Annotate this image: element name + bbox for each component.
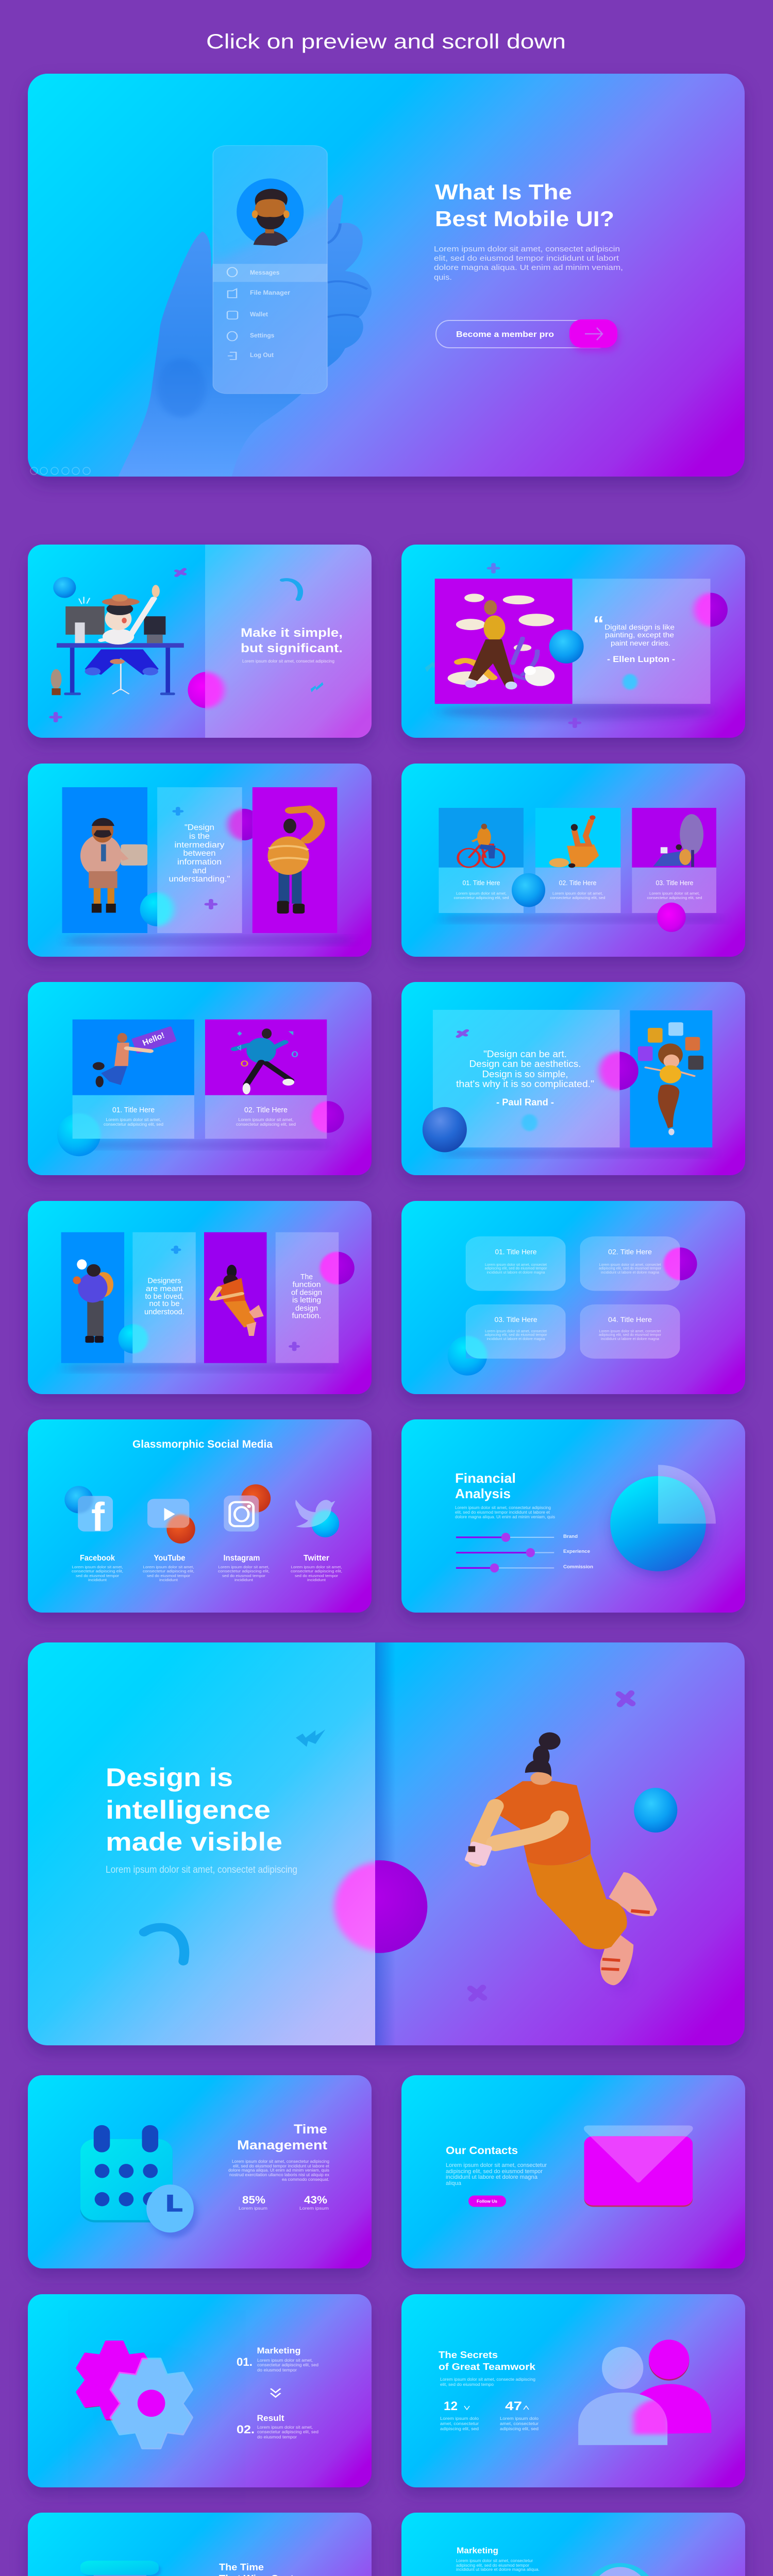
slide controls — [30, 467, 90, 474]
heading: Best Mobile UI? — [435, 207, 614, 231]
heading — [106, 1763, 282, 1856]
step 01: Marketing — [257, 2346, 301, 2355]
card text: consectetur adipiscing elit, sed — [647, 895, 702, 900]
quote text: Design can be aesthetics. — [469, 1059, 581, 1069]
stat: 85% — [239, 2194, 267, 2211]
body text — [434, 245, 623, 282]
card text: adipiscing elit, sed do eiusmod tempor — [599, 1267, 662, 1270]
card text — [484, 1263, 662, 1341]
card text: adipiscing elit, sed do eiusmod tempor — [599, 1333, 662, 1337]
heading: Glassmorphic Social Media — [132, 1438, 273, 1450]
network text — [72, 1565, 342, 1582]
card text: Lorem ipsum dolor sit amet, — [106, 1117, 161, 1122]
stat: 12 down: 12 — [444, 2399, 458, 2413]
ball behind glass — [332, 1860, 427, 1953]
panel: four columns — [28, 1201, 372, 1401]
network text: Lorem ipsum dolor sit amet, — [72, 1565, 123, 1569]
menu labels: Wallet — [250, 311, 268, 318]
network text: consectetur adipiscing elit, — [218, 1569, 270, 1573]
decorative balls behind glass — [53, 577, 224, 708]
glass block, image block and figure — [423, 1010, 712, 1156]
stat: 47 up: adipiscing elit, sed — [500, 2426, 539, 2431]
column text: function: function — [293, 1281, 321, 1289]
card titles — [495, 1248, 652, 1324]
quote text: and — [193, 867, 206, 875]
quote text: intermediary — [174, 841, 225, 850]
body text: aliqua — [446, 2180, 462, 2187]
heading: of Great Teamwork — [439, 2362, 536, 2372]
stat: 43%: 43% — [304, 2194, 327, 2206]
network text: consectetur adipiscing elit, — [72, 1569, 123, 1573]
step 01: consectetur adipiscing elit, sed — [257, 2362, 318, 2367]
quote text: information — [177, 858, 222, 867]
step 01: Lorem ipsum dolor sit amet, — [257, 2358, 313, 2363]
panel: four glass cards — [401, 1201, 745, 1401]
button — [468, 2196, 506, 2207]
network text: Lorem ipsum dolor sit amet, — [143, 1565, 194, 1569]
stat: 85%: 85% — [242, 2194, 265, 2206]
heading — [435, 180, 614, 231]
heading — [219, 2562, 325, 2576]
column text: designers — [144, 1277, 184, 1316]
section: marketing: Marketing — [457, 2546, 498, 2555]
card text: Lorem ipsum dolor sit amet, consectet — [599, 1330, 661, 1333]
body text: nostrud exercitation ullamco laboris nisi ut aliquip ex — [229, 2172, 330, 2177]
card titles: 04. Title Here — [608, 1315, 652, 1324]
columns and figures — [62, 787, 350, 943]
section: marketing — [456, 2546, 540, 2572]
image block and glass quote block — [425, 564, 728, 727]
heading: The Time — [219, 2562, 264, 2572]
quote text: "Design — [184, 823, 214, 832]
body text — [440, 2377, 535, 2387]
network text: consectetur adipiscing elit, — [143, 1569, 194, 1573]
panel: marketing result — [28, 2294, 372, 2495]
heading: The Secrets — [439, 2350, 498, 2360]
heading — [237, 2122, 328, 2153]
quote text: - Paul Rand - — [496, 1097, 554, 1108]
card titles: 01. Title Here — [495, 1248, 537, 1256]
quote text: between — [183, 849, 215, 858]
balls and glass cards — [448, 1236, 697, 1376]
quote text: Design is so simple, — [482, 1069, 568, 1079]
panel: three titled cards — [401, 764, 745, 964]
network names: Instagram — [224, 1554, 260, 1563]
card titles: 03. Title Here — [495, 1315, 537, 1324]
network text: sed do eiusmod tempor — [222, 1573, 266, 1578]
body text: dolore magna aliqua. Ut enim ad minim veniam, quis — [228, 2167, 329, 2173]
body text: Lorem ipsum dolor sit amet, consectetur adipiscing — [232, 2159, 329, 2164]
icon: magnifying glass — [577, 2564, 683, 2576]
card text: Lorem ipsum dolor sit amet, consectet — [485, 1263, 547, 1267]
column text: function: is letting — [292, 1296, 321, 1304]
heading: Make it simple, — [241, 626, 343, 640]
card text: Lorem ipsum dolor sit amet, — [552, 891, 603, 895]
card text — [453, 891, 702, 900]
column text: designers: to be loved, — [145, 1293, 183, 1301]
card text: consectetur adipiscing elit, sed — [104, 1122, 163, 1127]
illustration: floating woman — [144, 1688, 677, 2004]
panel: design is intelligence made visible — [28, 1642, 745, 2054]
slider labels: Experience — [563, 1549, 590, 1554]
card text: incididunt ut labore et dolore magna — [486, 1337, 545, 1341]
body text: Lorem ipsum dolor sit amet, consectet adipiscin — [434, 245, 620, 253]
panel: marketing, SEO, entertainment — [401, 2513, 745, 2576]
column text: function — [291, 1273, 322, 1320]
slider labels: Brand — [563, 1534, 578, 1539]
card text: Lorem ipsum dolor sit amet, consectet — [599, 1263, 661, 1267]
caption: Lorem ipsum dolor sit amet, consectet adipiscing — [242, 658, 334, 664]
column text: designers: Designers — [147, 1277, 181, 1285]
slider labels — [563, 1534, 593, 1570]
body text: dolore magna aliqua. Ut enim ad minim veniam, — [434, 264, 623, 272]
stat: 43% — [299, 2194, 329, 2211]
card text: consectetur adipiscing elit, sed — [550, 895, 605, 900]
menu labels: Log Out — [250, 351, 274, 359]
stat: 12 down: amet, consectetur — [440, 2421, 479, 2426]
panel: three columns quote — [28, 764, 372, 964]
network text: incididunt — [234, 1578, 254, 1582]
stat: 12 down: adipiscing elit, sed — [440, 2426, 479, 2431]
heading — [439, 2350, 536, 2372]
network text: incididunt — [88, 1578, 107, 1582]
glass shadow strip — [375, 1642, 396, 2045]
button: Become a member pro — [456, 330, 554, 339]
caption: Lorem ipsum dolor sit amet, consectet adipiscing — [106, 1865, 297, 1875]
quote text: paint never dries. — [611, 639, 670, 647]
network text: consectetur adipiscing elit, — [291, 1569, 342, 1573]
panel: two titled cards — [28, 982, 372, 1182]
illustration: person at desk — [51, 568, 324, 721]
card titles: 02. Title Here — [608, 1248, 652, 1256]
step 01: 01. — [237, 2355, 253, 2368]
quote mark: “ — [593, 612, 604, 636]
quote text — [456, 1049, 594, 1108]
network text: sed do eiusmod tempor — [147, 1573, 191, 1578]
column text: function: The — [300, 1273, 313, 1281]
body text — [228, 2159, 330, 2182]
step 02 — [237, 2413, 318, 2439]
panel: time management — [28, 2075, 372, 2276]
heading: Management — [237, 2138, 328, 2153]
network text: Lorem ipsum dolor sit amet, — [219, 1565, 269, 1569]
stat: 43%: Lorem ipsum — [299, 2206, 329, 2211]
stat: 47 up — [500, 2399, 539, 2431]
heading — [241, 626, 343, 655]
stat: 47 up: amet, consectetur — [500, 2421, 539, 2426]
step 02: consectetur adipiscing elit, sed — [257, 2429, 318, 2434]
quote text: "Design can be art. — [483, 1049, 567, 1059]
body text: Lorem ipsum dolor sit amet, consectetur adipiscing — [455, 1505, 551, 1510]
quote text: painting, except the — [605, 631, 674, 639]
step 01: do eiusmod tempor — [257, 2367, 297, 2372]
body text: elit, sed do eiusmod tempor incididunt ut labore et — [455, 1510, 550, 1515]
quote text: that's why it is so complicated." — [456, 1079, 594, 1089]
menu labels: Messages — [250, 269, 280, 276]
quote text: understanding." — [169, 875, 230, 884]
facebook glyph: f — [91, 1494, 105, 1539]
card text: adipiscing elit, sed do eiusmod tempor — [484, 1333, 547, 1337]
step 02: Lorem ipsum dolor sit amet, — [257, 2425, 313, 2430]
stat: 85%: Lorem ipsum — [239, 2206, 267, 2211]
network names: Twitter — [304, 1554, 329, 1563]
icon: envelope — [584, 2125, 693, 2207]
quote text: - Ellen Lupton - — [607, 654, 675, 664]
menu labels: File Manager — [250, 289, 290, 296]
heading: Financial — [455, 1470, 516, 1486]
card titles: 03. Title Here — [656, 879, 694, 887]
column text: designers: understood. — [144, 1308, 184, 1316]
panel: Paul Rand quote — [401, 982, 745, 1182]
panel: Ellen Lupton quote — [401, 545, 745, 745]
column text: function: design — [295, 1304, 318, 1313]
panel: financial analysis — [401, 1419, 745, 1620]
card text: incididunt ut labore et dolore magna — [486, 1271, 545, 1275]
card titles — [463, 879, 694, 887]
card titles: 02. Title Here — [559, 879, 597, 887]
stat: 47 up: Lorem ipsum dolo — [500, 2416, 539, 2421]
card titles — [112, 1106, 288, 1114]
illustration: hand holding glass phone — [119, 146, 372, 477]
body text: dolore magna aliqua. Ut enim ad minim veniam, quis — [455, 1515, 555, 1519]
card text: consectetur adipiscing elit, sed — [453, 895, 509, 900]
heading: Our Contacts — [446, 2145, 518, 2157]
column text: designers: not to be — [149, 1300, 179, 1308]
panel: our contacts — [401, 2075, 745, 2276]
social icons — [64, 1484, 340, 1544]
icon: hourglass — [80, 2561, 168, 2576]
card images and figures — [57, 1020, 344, 1156]
title: Click on preview and scroll down — [206, 30, 566, 53]
heading: Analysis — [455, 1486, 511, 1501]
stat: 47 up: 47 — [505, 2399, 522, 2413]
heading: Time — [294, 2122, 327, 2137]
card titles: 01. Title Here — [112, 1106, 155, 1114]
body text — [455, 1505, 555, 1519]
stat: 12 down: Lorem ipsum dolo — [440, 2416, 479, 2421]
body text: incididunt ut labore et dolore magna — [446, 2174, 538, 2180]
body text: elit, sed do eiusmod tempor incididunt ut labore et — [233, 2163, 330, 2168]
body text: quis. — [434, 274, 452, 282]
card text: Lorem ipsum dolor sit amet, — [456, 891, 507, 895]
panel: time that wins customers — [28, 2513, 372, 2576]
body text: elit, sed do eiusmod tempor incididunt ut labort — [434, 255, 619, 263]
quote text: is the — [189, 832, 210, 841]
column text: designers: are meant — [146, 1285, 183, 1293]
body text: Lorem ipsum dolor sit amet, consectetur — [446, 2162, 547, 2168]
quote text — [169, 823, 230, 884]
card text: incididunt ut labore et dolore magna — [601, 1337, 659, 1341]
body text: ea commodo consequat. — [282, 2177, 329, 2182]
chart: sliders and pie — [456, 1465, 716, 1576]
stat: 12 down — [440, 2399, 479, 2431]
heading: What Is The — [435, 180, 572, 204]
heading — [455, 1470, 516, 1501]
body text — [446, 2162, 547, 2187]
columns and figures — [61, 1232, 355, 1371]
step 02: Result — [257, 2413, 284, 2423]
column text: function: of design — [291, 1289, 322, 1297]
network names: YouTube — [154, 1554, 186, 1563]
network names — [80, 1554, 329, 1563]
network text: sed do eiusmod tempor — [76, 1573, 120, 1578]
network text: sed do eiusmod tempor — [295, 1573, 339, 1578]
heading: but significant. — [241, 641, 343, 655]
body text: Lorem ipsum dolor sit amet, consecte adipiscing — [440, 2377, 535, 2382]
heading: Design is — [106, 1763, 233, 1792]
card text: adipiscing elit, sed do eiusmod tempor — [484, 1267, 547, 1270]
icon: team people — [578, 2340, 711, 2446]
card text: Lorem ipsum dolor sit amet, consectet — [485, 1330, 547, 1333]
card text: consectetur adipiscing elit, sed — [236, 1122, 296, 1127]
network text: incididunt — [307, 1578, 326, 1582]
body text: adipiscing elit, sed do eiusmod tempor — [446, 2168, 543, 2175]
button — [436, 319, 619, 352]
card text: incididunt ut labore et dolore magna — [601, 1271, 659, 1275]
card text: Lorem ipsum dolor sit amet, — [238, 1117, 294, 1122]
network names: Facebook — [80, 1554, 115, 1563]
card images and figures — [439, 808, 720, 932]
panel: make it simple — [28, 545, 372, 745]
card titles: 02. Title Here — [244, 1106, 288, 1114]
section: marketing: incididunt ut labore et dolore magna aliqua. — [456, 2567, 540, 2572]
panel: secrets of great teamwork — [401, 2294, 745, 2495]
panel: hero mobile UI — [28, 74, 745, 485]
heading: made visible — [106, 1827, 282, 1856]
section: marketing: adipiscing elit, sed do eiusmod tempor — [456, 2563, 529, 2568]
card text: Lorem ipsum dolor sit amet, — [649, 891, 700, 895]
step 02: 02. — [237, 2423, 255, 2436]
card titles: 01. Title Here — [463, 879, 500, 887]
section: marketing: Lorem ipsum dolor sit amet, consectetur — [456, 2558, 533, 2563]
button: Follow Us — [477, 2199, 497, 2204]
network text: incididunt — [159, 1578, 178, 1582]
quote text: Digital design is like — [604, 623, 675, 631]
quote text — [604, 623, 675, 664]
slider labels: Commission — [563, 1564, 593, 1570]
panel: glassmorphic social media — [28, 1419, 372, 1620]
menu labels: Settings — [250, 332, 275, 339]
step 02: do eiusmod tempor — [257, 2434, 297, 2439]
sign label: Hello! — [141, 1031, 166, 1048]
menu labels — [250, 269, 290, 359]
icon: calendar with clock — [80, 2125, 197, 2238]
step 01 — [237, 2346, 318, 2372]
network text: Lorem ipsum dolor sit amet, — [291, 1565, 342, 1569]
icon: gears — [77, 2342, 280, 2452]
body text: elit, sed do eiusmod tempo — [440, 2382, 494, 2387]
column text: function: function. — [292, 1312, 322, 1320]
card text — [104, 1117, 296, 1127]
heading: intelligence — [106, 1795, 271, 1824]
